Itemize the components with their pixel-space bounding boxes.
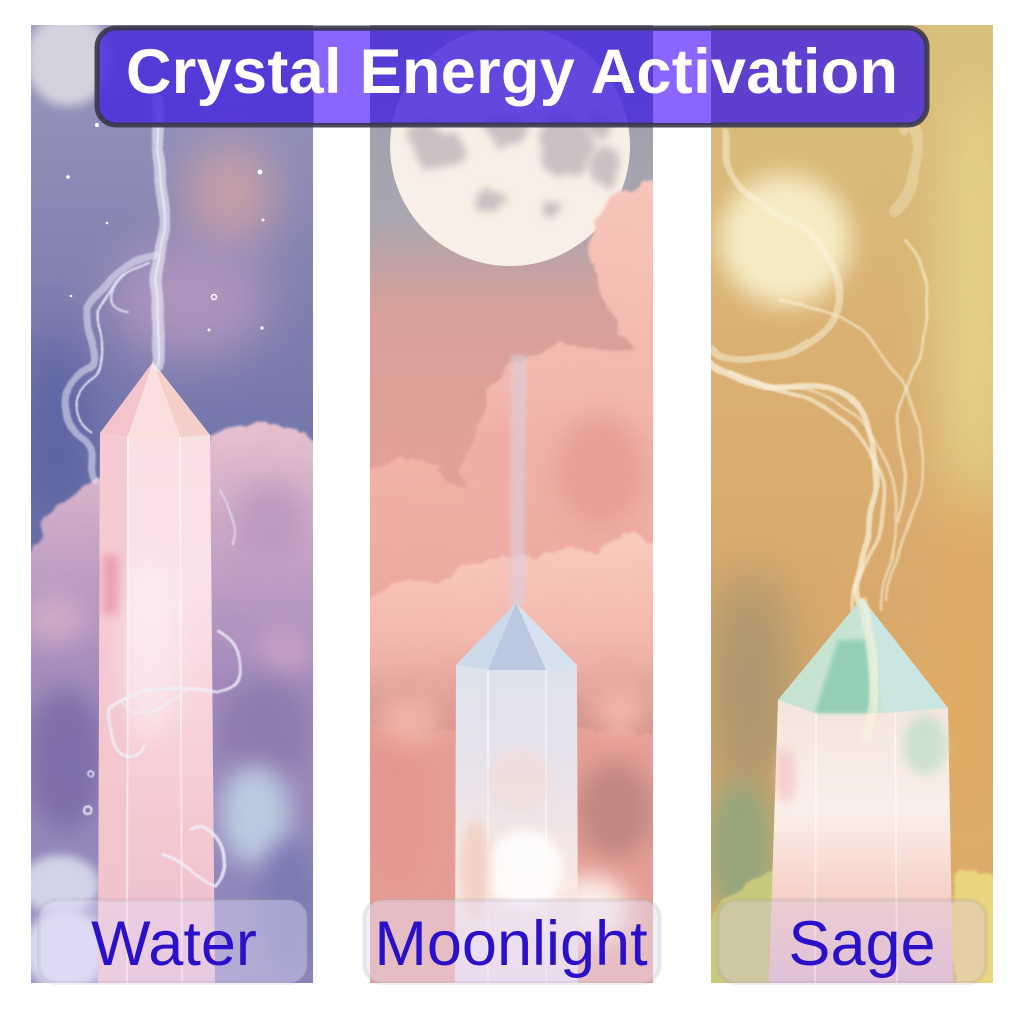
title banner xyxy=(97,28,927,125)
label: water: Water xyxy=(91,909,257,979)
cloud: top-left xyxy=(31,25,104,112)
crystal: rose quartz xyxy=(98,362,215,983)
water stream xyxy=(65,100,242,885)
moonbeam xyxy=(510,355,527,605)
panel: sage xyxy=(704,25,1009,990)
panel background: dusk sky xyxy=(370,25,653,490)
label: moonlight: Moonlight xyxy=(374,909,648,979)
crystal: fluorite xyxy=(769,598,953,983)
sage smoke xyxy=(711,127,928,640)
label: sage xyxy=(718,900,986,983)
label: water xyxy=(39,900,307,983)
yellow clouds xyxy=(952,868,993,983)
panel: moonlight xyxy=(360,25,665,1000)
title: Crystal Energy Activation xyxy=(126,37,898,107)
crystal: clear quartz xyxy=(455,603,578,983)
moon xyxy=(390,26,630,266)
label: sage: Sage xyxy=(788,909,936,979)
stars xyxy=(66,123,264,332)
panel background: golden haze xyxy=(711,25,993,983)
panel background: water sky xyxy=(31,25,313,554)
panel: water xyxy=(31,25,313,983)
clouds: moonlight front layer xyxy=(360,532,665,730)
clouds: water panel xyxy=(20,422,325,1000)
smoke cloud xyxy=(719,174,851,306)
clouds: moonlight back layer xyxy=(370,179,653,596)
